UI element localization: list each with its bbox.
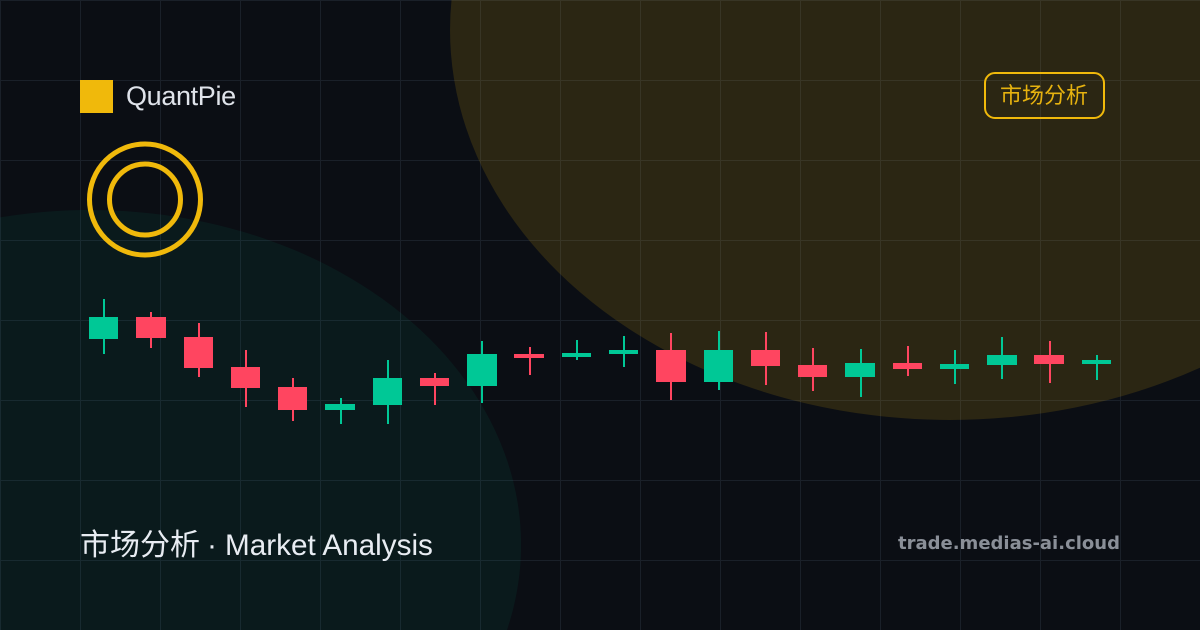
logo mark (80, 80, 113, 113)
brand name: QuantPie (126, 81, 236, 111)
yellow background ellipse (450, 0, 1200, 420)
site url: trade.medias-ai.cloud (898, 533, 1120, 554)
badge: market analysis: 市场分析 (1000, 83, 1088, 108)
title: Market Analysis (225, 529, 433, 562)
title: 市场分析 (80, 529, 200, 562)
badge: market analysis (985, 73, 1104, 118)
title: · (207, 529, 217, 562)
icon: concentric rings (90, 144, 200, 255)
teal background ellipse (0, 210, 521, 630)
candlestick chart (89, 299, 1111, 424)
